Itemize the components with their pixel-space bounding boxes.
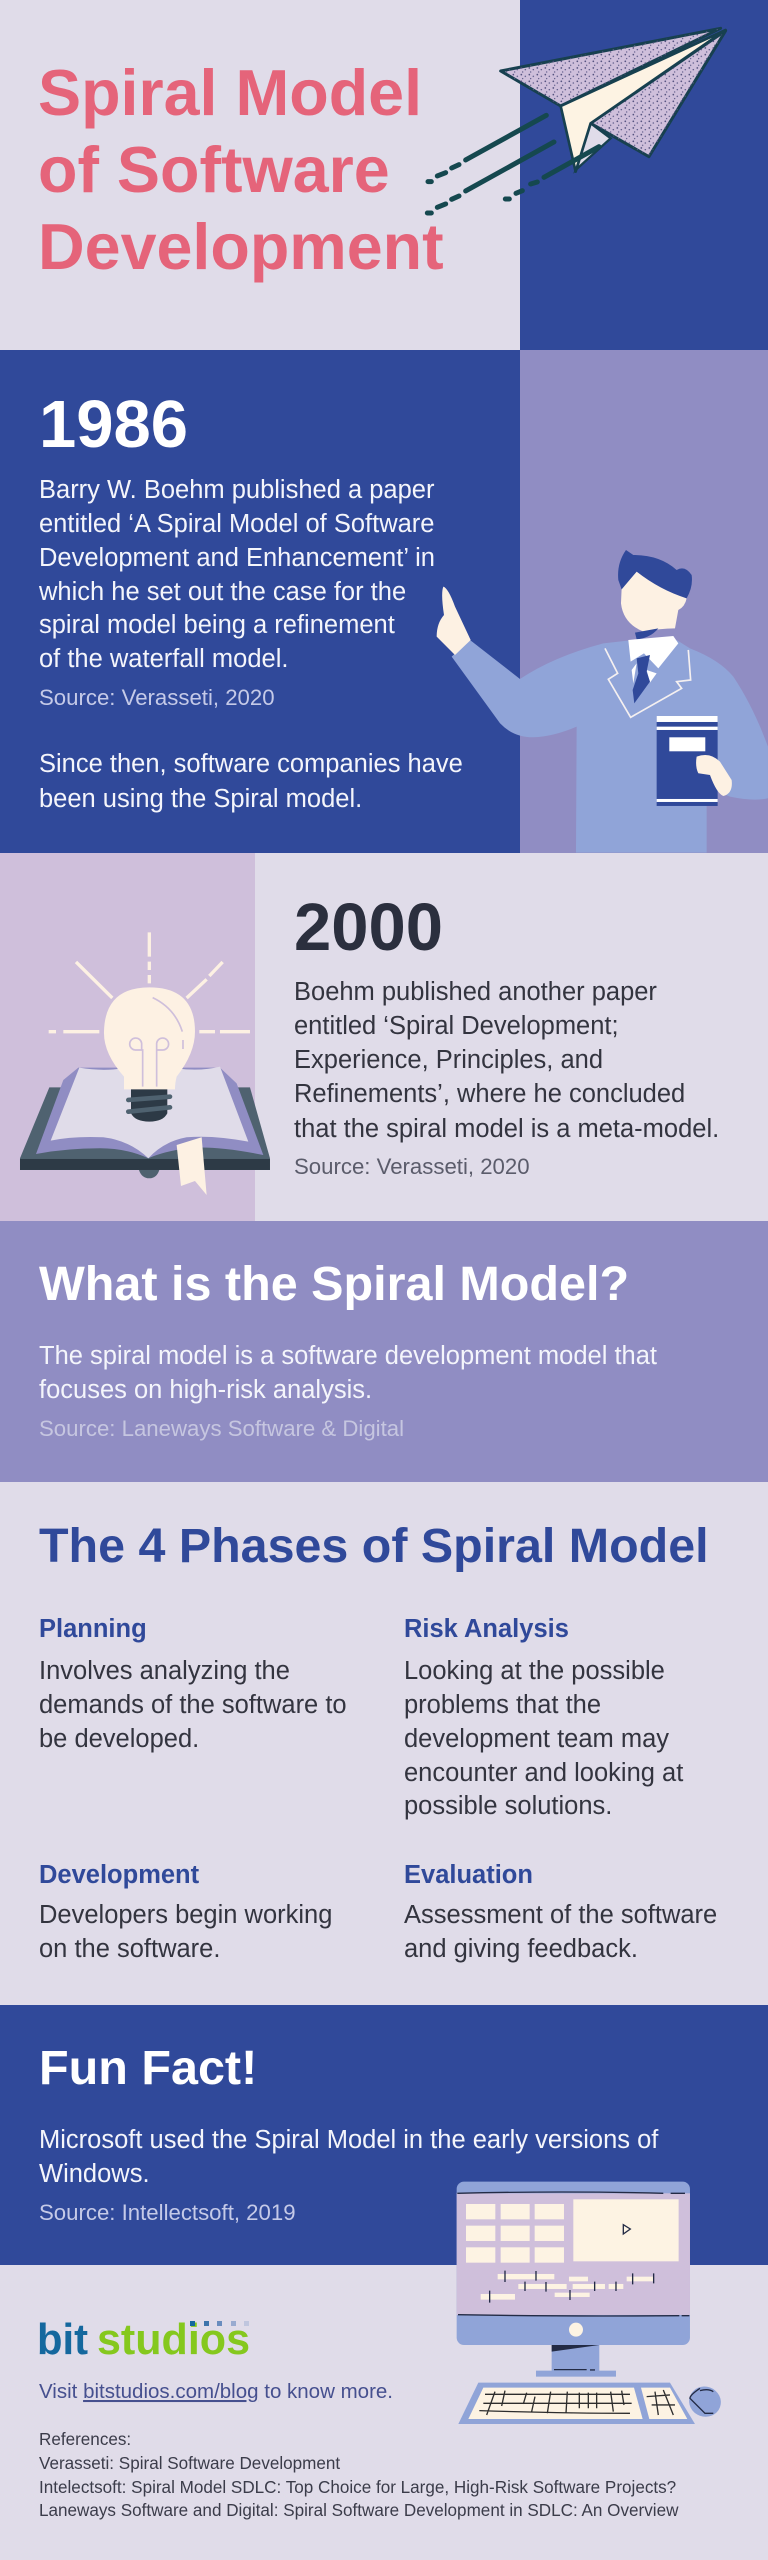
heading: 1986: 1986 [39,387,188,462]
phase: development [39,1861,332,1963]
logo: bit studios: bit [37,2315,88,2364]
source: Source: Laneways Software & Digital [39,1416,404,1441]
phase: planning: demands of the software to [39,1691,347,1719]
heading: Fun Fact! [39,2041,257,2095]
phase: evaluation: Assessment of the software [404,1901,717,1929]
icon: paper plane [427,28,726,213]
text: visit: Visit bitstudios.com/blog to know more. [39,2380,393,2403]
heading: What is the Spiral Model? [39,1257,629,1311]
phase: development: Developers begin working [39,1901,332,1929]
text: 2000 body: Experience, Principles, and [294,1046,603,1074]
icon: presenter with book [437,550,768,853]
text: fact: Windows. [39,2160,150,2188]
phase: evaluation: Evaluation [404,1861,533,1889]
panel: 4 phases [0,1482,768,2005]
logo: bit studios: studios [97,2315,250,2364]
text: references: References: [39,2430,131,2449]
text: 2000 body: that the spiral model is a meta-model. [294,1115,719,1143]
text: references: Intelectsoft: Spiral Model SDLC: Top Choice for Large, High-Risk Software Projects? [39,2478,676,2497]
phase: risk analysis: possible solutions. [404,1792,612,1820]
text: 2000 body: Refinements’, where he concluded [294,1080,685,1108]
phase: development: Development [39,1861,200,1889]
panel: 1986 [0,350,768,853]
phase: development: on the software. [39,1935,220,1963]
text: fact: Microsoft used the Spiral Model in the early versions of [39,2126,659,2154]
text: 1986 body: which he set out the case for the [38,578,406,606]
panel: 2000 [0,853,768,1221]
text: references: Verasseti: Spiral Software Development [39,2454,340,2473]
title: Spiral Model [38,57,422,129]
panel: title [0,0,768,350]
panel: what is the spiral model [0,1221,768,1482]
text: 1986 body: entitled ‘A Spiral Model of Software [39,510,434,538]
heading: The 4 Phases of Spiral Model [39,1519,709,1573]
source: Source: Verasseti, 2020 [39,685,275,710]
title: of Software [38,134,390,206]
text: 1986 body: Development and Enhancement’ in [39,544,435,572]
icon: desktop computer [457,2182,725,2424]
phase: risk analysis: development team may [404,1725,669,1753]
phase: planning: Involves analyzing the [39,1657,290,1685]
source: Source: Intellectsoft, 2019 [39,2200,296,2225]
title: Development [38,211,444,283]
phase: planning: Planning [39,1615,147,1643]
phase: risk analysis: encounter and looking at [404,1759,683,1787]
phase: risk analysis [404,1615,683,1820]
phase: evaluation: and giving feedback. [404,1935,638,1963]
text: definition: The spiral model is a software development model that [39,1342,657,1370]
heading: 2000: 2000 [294,890,443,965]
phase: risk analysis: problems that the [404,1691,601,1719]
text: 1986 body: spiral model being a refinement [39,611,395,639]
phase: risk analysis: Risk Analysis [404,1615,569,1643]
phase: planning: be developed. [39,1725,199,1753]
panel: fun fact [0,2005,768,2265]
text: 1986 body: of the waterfall model. [39,645,288,673]
icon: light bulb on open book [20,932,270,1195]
text: 1986 body: Barry W. Boehm published a paper [39,476,435,504]
text: definition: focuses on high-risk analysis. [39,1376,372,1404]
text: since then: Since then, software companies have [39,750,463,778]
source: Source: Verasseti, 2020 [294,1154,530,1179]
text: 2000 body: entitled ‘Spiral Development; [294,1012,619,1040]
text: references: Laneways Software and Digital: Spiral Software Development in SDLC: An Overview [39,2501,679,2520]
text: 2000 body: Boehm published another paper [294,978,657,1006]
phase: risk analysis: Looking at the possible [404,1657,665,1685]
panel: footer [0,2265,768,2560]
phase: planning [39,1615,347,1753]
phase: evaluation [404,1861,717,1963]
text: since then: been using the Spiral model. [39,785,362,813]
